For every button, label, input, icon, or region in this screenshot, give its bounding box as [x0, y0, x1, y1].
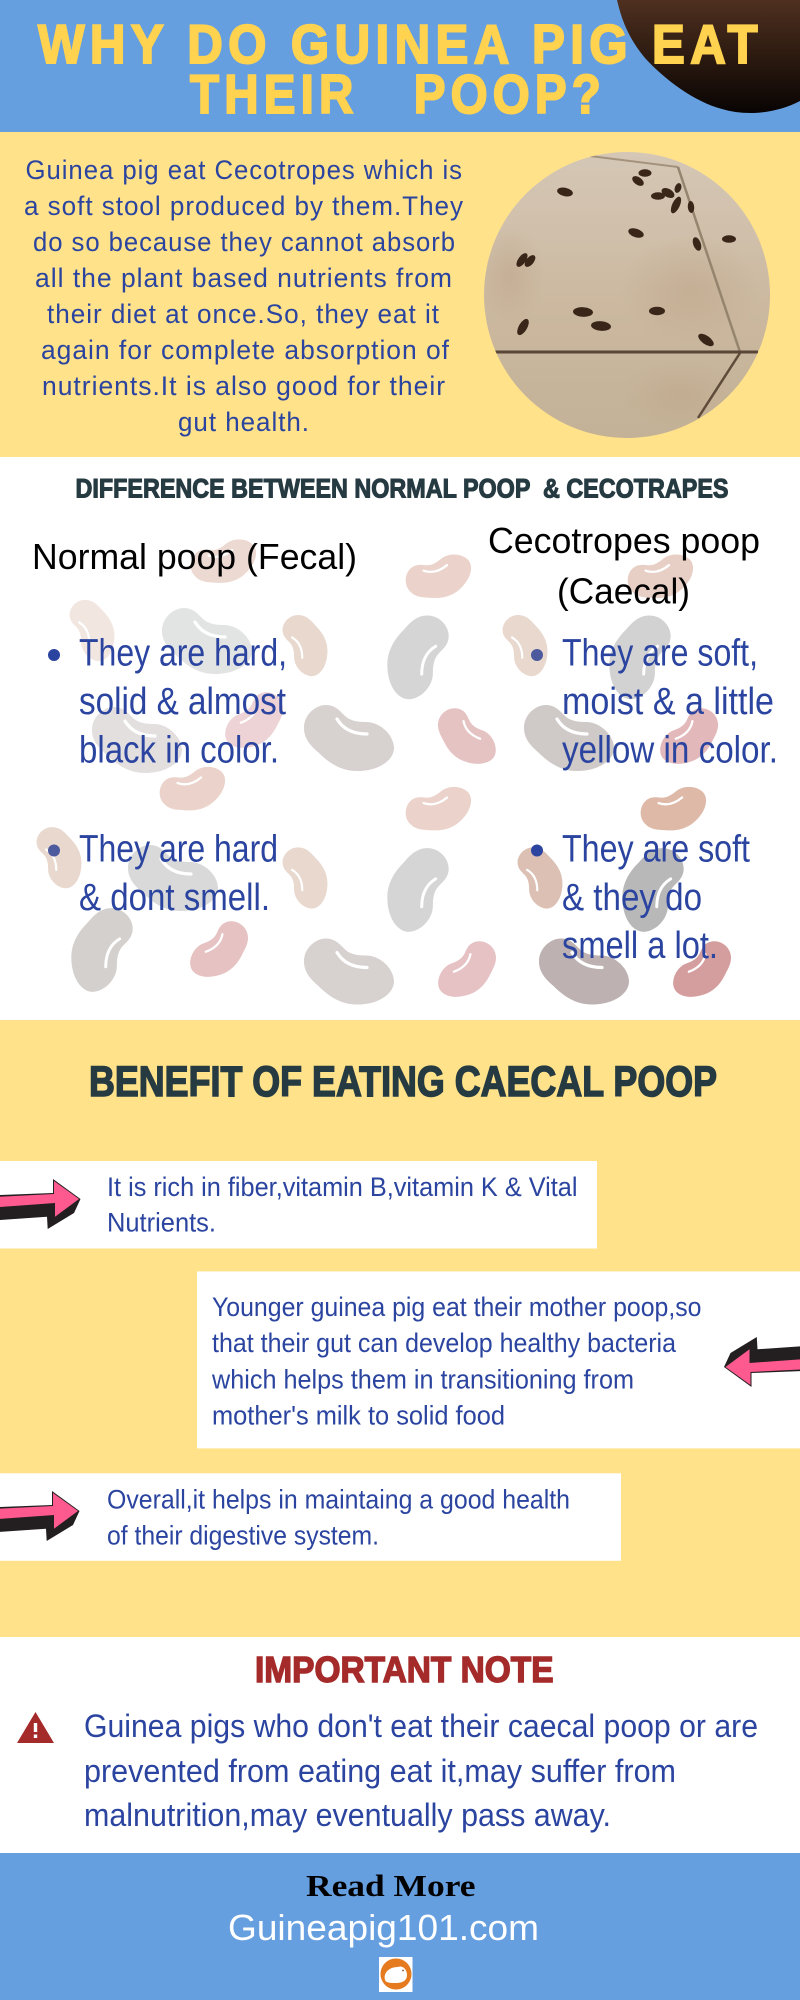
- icon: warning triangle: [17, 1712, 54, 1743]
- panel: intro: [0, 132, 800, 457]
- intro paragraph: again for complete absorption of: [41, 335, 450, 365]
- list: cecotropes poop: moist & a little: [562, 681, 774, 723]
- intro paragraph: nutrients.It is also good for their: [42, 371, 446, 401]
- benefit text 2: mother's milk to solid food: [212, 1400, 505, 1430]
- list: cecotropes poop: smell a lot.: [562, 925, 718, 967]
- intro paragraph: [24, 155, 464, 437]
- benefit text 2: [211, 1292, 702, 1430]
- benefit text 2: which helps them in transitioning from: [211, 1365, 634, 1395]
- list: normal poop: & dont smell.: [79, 877, 270, 919]
- intro paragraph: Guinea pig eat Cecotropes which is: [26, 155, 463, 185]
- read more: Read More: [306, 1868, 476, 1903]
- intro paragraph: a soft stool produced by them.They: [24, 191, 464, 221]
- panel: difference between normal poop and cecotropes: [0, 457, 800, 1020]
- dark blob decoration: [617, 0, 800, 113]
- arrow right 2: [0, 1491, 80, 1541]
- intro paragraph: their diet at once.So, they eat it: [47, 299, 440, 329]
- background bean pattern: [37, 521, 741, 1004]
- list: cecotropes poop: They are soft,: [562, 633, 758, 675]
- list: normal poop: They are hard,: [79, 633, 287, 675]
- column heading: cecotropes poop: (Caecal): [557, 570, 690, 612]
- header band: [0, 0, 800, 132]
- title: THEIR POOP?: [190, 63, 606, 125]
- list: normal poop: solid & almost: [79, 681, 286, 723]
- panel: benefits: [0, 1020, 800, 1637]
- benefit card 2: [197, 1271, 800, 1448]
- icon: guinea pig logo: [379, 1957, 412, 1992]
- benefit text 1: Nutrients.: [107, 1208, 216, 1238]
- benefit text 2: that their gut can develop healthy bacteria: [212, 1328, 677, 1358]
- column heading: cecotropes poop: [488, 520, 760, 612]
- list: cecotropes poop: & they do: [562, 877, 702, 919]
- intro paragraph: do so because they cannot absorb: [33, 227, 456, 257]
- benefit text 3: Overall,it helps in maintaing a good health: [107, 1485, 570, 1515]
- note text: prevented from eating eat it,may suffer from: [84, 1753, 676, 1789]
- intro paragraph: gut health.: [178, 407, 310, 437]
- note text: Guinea pigs who don't eat their caecal poop or are: [84, 1708, 758, 1744]
- list: normal poop: [48, 633, 287, 919]
- panel: important note: [0, 1637, 800, 1853]
- benefit text 1: [107, 1172, 578, 1238]
- list: normal poop: They are hard: [79, 828, 278, 870]
- benefit text 2: Younger guinea pig eat their mother poop,so: [212, 1292, 702, 1322]
- note text: [84, 1708, 758, 1833]
- footer band: [0, 1853, 800, 2000]
- benefit text 3: of their digestive system.: [107, 1520, 379, 1550]
- benefit text 3: [107, 1485, 570, 1550]
- title: [38, 13, 763, 125]
- note text: malnutrition,may eventually pass away.: [84, 1797, 611, 1833]
- photo: droppings on tile floor: [475, 152, 770, 438]
- list: cecotropes poop: They are soft: [562, 828, 750, 870]
- intro paragraph: all the plant based nutrients from: [35, 263, 453, 293]
- arrow left: [724, 1337, 800, 1387]
- column heading: normal poop: Normal poop (Fecal): [32, 536, 357, 577]
- list: normal poop: black in color.: [79, 730, 279, 772]
- column heading: cecotropes poop: Cecotropes poop: [488, 520, 760, 561]
- benefit card 1: [0, 1161, 597, 1248]
- website: Guineapig101.com: [228, 1907, 539, 1948]
- arrow right 1: [0, 1179, 80, 1229]
- list: cecotropes poop: [531, 633, 778, 967]
- benefit card 3: [0, 1473, 621, 1561]
- benefit text 1: It is rich in fiber,vitamin B,vitamin K & Vital: [107, 1172, 578, 1202]
- note heading: IMPORTANT NOTE: [255, 1649, 554, 1690]
